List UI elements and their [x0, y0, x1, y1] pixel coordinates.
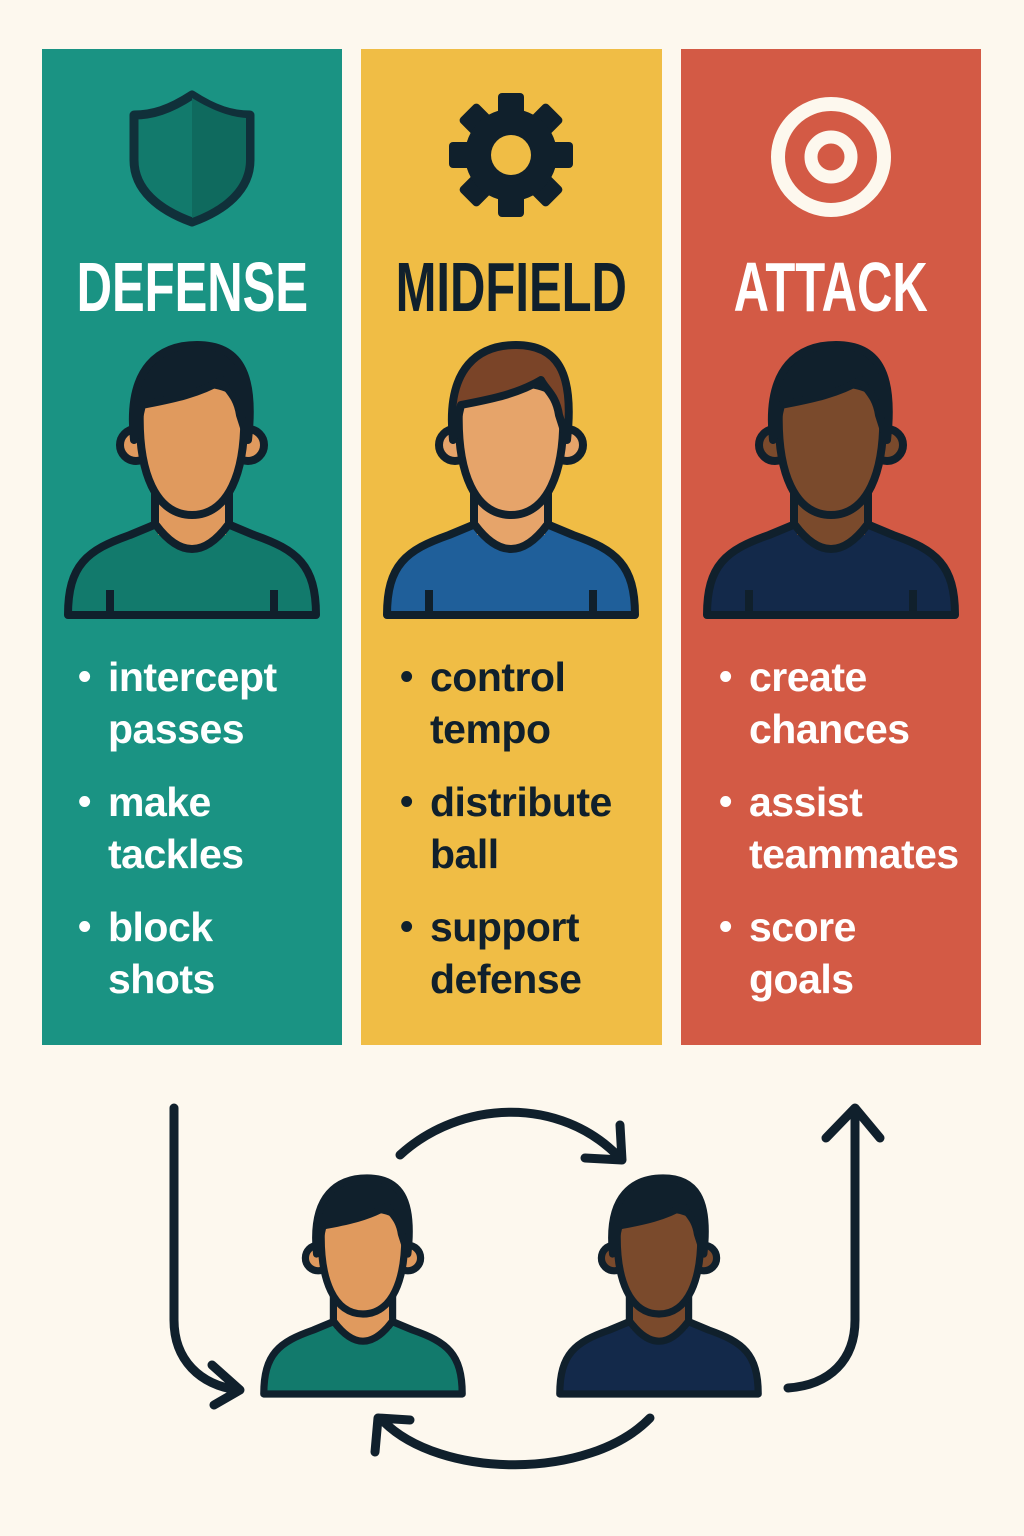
heading: attack: ATTACK	[734, 248, 928, 326]
list: midfield duties: ball	[430, 831, 499, 877]
list: defense duties: block	[108, 904, 213, 950]
arrows: rotation cycle	[174, 1108, 880, 1465]
list: attack duties: goals	[749, 956, 854, 1002]
panel: defense	[42, 49, 342, 1045]
list: defense duties: make	[108, 779, 211, 825]
list: midfield duties	[401, 654, 612, 1002]
list: midfield duties: distribute	[430, 779, 612, 825]
avatar: small attacker	[560, 1178, 758, 1394]
panel: midfield	[361, 49, 662, 1045]
icon: shield	[134, 95, 250, 222]
panel: attack	[681, 49, 981, 1045]
list: attack duties: teammates	[749, 831, 959, 877]
list: attack duties: chances	[749, 706, 910, 752]
arrow: top arc	[400, 1112, 622, 1160]
heading: defense: DEFENSE	[76, 248, 308, 326]
list: defense duties: passes	[108, 706, 244, 752]
arrow: right up	[788, 1108, 880, 1388]
avatar: small defender	[264, 1178, 462, 1394]
list: attack duties: score	[749, 904, 856, 950]
avatar: attack player	[707, 345, 955, 615]
icon: target	[778, 104, 884, 210]
avatar: midfield player	[387, 345, 635, 615]
list: defense duties	[79, 654, 277, 1002]
avatar: defense player	[68, 345, 316, 615]
list: attack duties: create	[749, 654, 867, 700]
list: defense duties: tackles	[108, 831, 244, 877]
arrow: left down	[174, 1108, 240, 1405]
list: midfield duties: control	[430, 654, 565, 700]
list: defense duties: intercept	[108, 654, 277, 700]
arrow: bottom arc	[375, 1418, 650, 1465]
list: midfield duties: defense	[430, 956, 581, 1002]
icon: gear	[449, 93, 573, 217]
heading: midfield: MIDFIELD	[395, 248, 627, 326]
list: defense duties: shots	[108, 956, 215, 1002]
list: attack duties	[720, 654, 959, 1002]
list: midfield duties: support	[430, 904, 579, 950]
list: midfield duties: tempo	[430, 706, 550, 752]
list: attack duties: assist	[749, 779, 862, 825]
